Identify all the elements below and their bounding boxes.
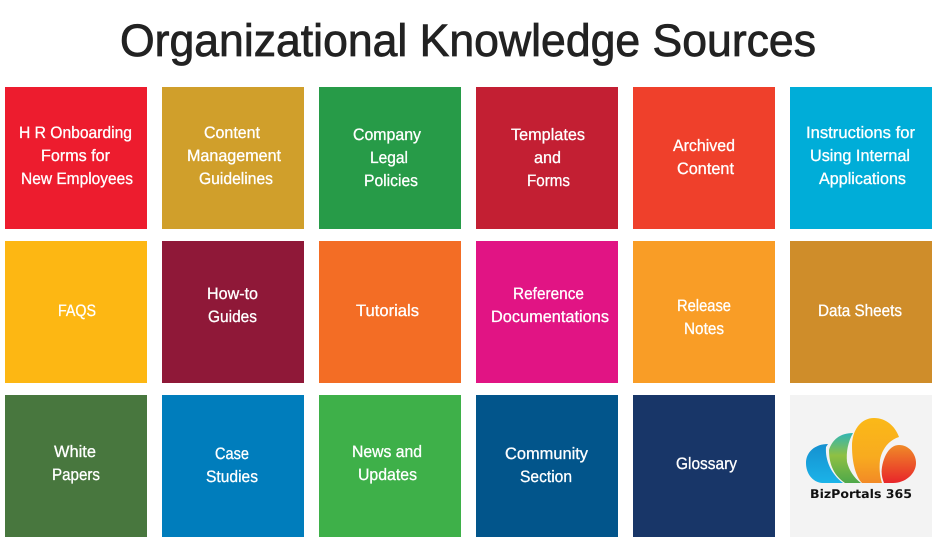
tile: how-to guides (162, 241, 304, 383)
tile: templates and forms: Templates (511, 126, 585, 144)
tile: glossary (633, 395, 775, 537)
tile: glossary: Glossary (676, 455, 738, 473)
tile: case studies: Studies (206, 468, 258, 486)
tile: content management guidelines: Management (187, 147, 281, 165)
tile: white papers (5, 395, 147, 537)
tile: how-to guides: How-to (207, 285, 258, 303)
tile: release notes: Notes (684, 320, 724, 338)
tile: company legal policies: Company (353, 126, 422, 144)
icon: yellow cloud lobe (852, 418, 899, 483)
tile: how-to guides: Guides (208, 308, 257, 326)
tile: company legal policies: Policies (364, 172, 418, 190)
tile: case studies: Case (215, 445, 249, 463)
tile: FAQS (5, 241, 147, 383)
icon: red cloud lobe (882, 445, 916, 483)
tile: HR onboarding forms: New Employees (21, 170, 133, 188)
tile: data sheets: Data Sheets (818, 302, 902, 320)
tile: instructions for internal applications (790, 87, 932, 229)
tile: community section: Community (505, 445, 589, 463)
tile: data sheets (790, 241, 932, 383)
tile: instructions for internal applications: Applications (819, 170, 906, 188)
tile: instructions for internal applications: Instructions for (806, 124, 915, 142)
tile: reference documentations: Documentations (491, 308, 609, 326)
tile: company legal policies (319, 87, 461, 229)
tile: HR onboarding forms: H R Onboarding (19, 124, 132, 142)
tile: news and updates: Updates (358, 466, 417, 484)
tile: reference documentations: Reference (513, 285, 584, 303)
tile: content management guidelines (162, 87, 304, 229)
tile: white papers: Papers (52, 466, 100, 484)
icon: blue cloud lobe (806, 444, 843, 483)
tile: release notes: Release (677, 297, 731, 315)
tile: community section (476, 395, 618, 537)
tile: news and updates (319, 395, 461, 537)
tile: case studies (162, 395, 304, 537)
tile: templates and forms (476, 87, 618, 229)
tile: archived content (633, 87, 775, 229)
icon: green cloud lobe (829, 433, 861, 483)
tile: HR onboarding forms (5, 87, 147, 229)
tile: reference documentations (476, 241, 618, 383)
tile: HR onboarding forms: Forms for (41, 147, 110, 165)
tile: archived content: Content (677, 160, 734, 178)
tile: white papers: White (54, 443, 96, 461)
tile: tutorials: Tutorials (356, 302, 419, 320)
tile: content management guidelines: Guidelines (199, 170, 273, 188)
logo wordmark: BizPortals 365 (810, 487, 912, 501)
tile: instructions for internal applications: Using Internal (810, 147, 910, 165)
title: Organizational Knowledge Sources (120, 15, 816, 66)
tile: company legal policies: Legal (370, 149, 408, 167)
tile: content management guidelines: Content (204, 124, 260, 142)
tile: templates and forms: Forms (527, 172, 570, 190)
tile: tutorials (319, 241, 461, 383)
tile: release notes (633, 241, 775, 383)
tile: news and updates: News and (352, 443, 422, 461)
tile: BizPortals 365 logo (790, 395, 932, 537)
tile: archived content: Archived (673, 137, 735, 155)
tile: templates and forms: and (534, 149, 561, 167)
tile: community section: Section (520, 468, 572, 486)
tile: FAQS: FAQS (58, 302, 96, 320)
